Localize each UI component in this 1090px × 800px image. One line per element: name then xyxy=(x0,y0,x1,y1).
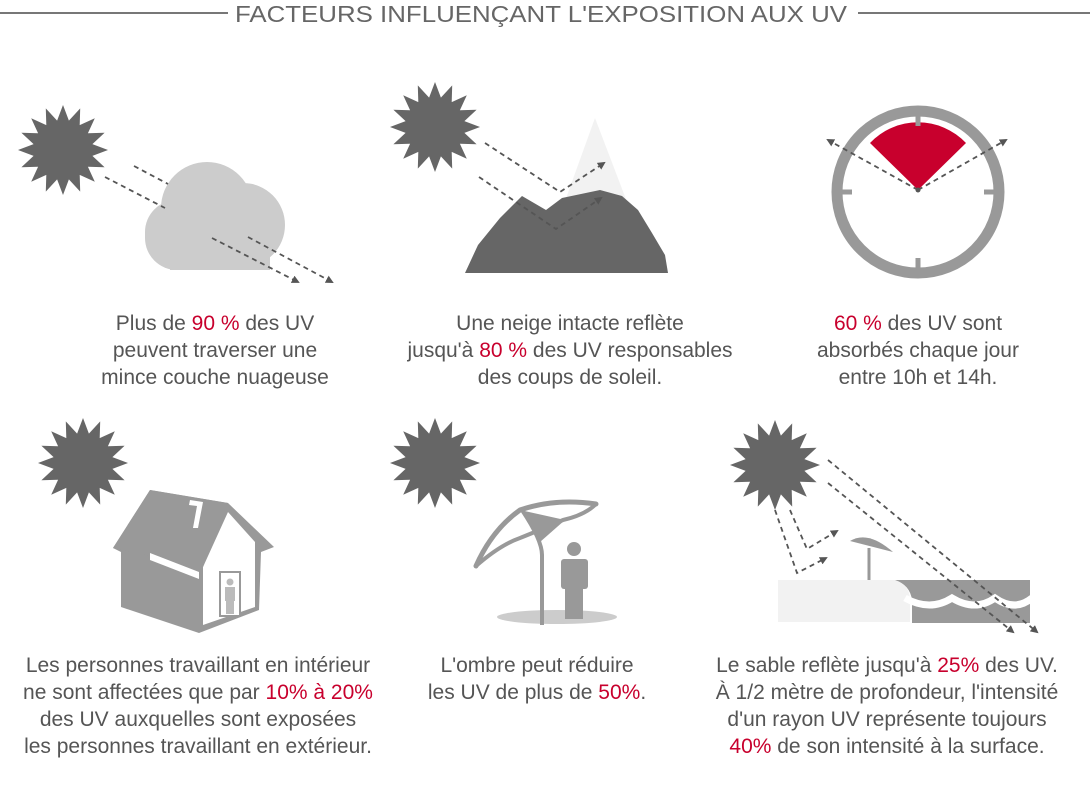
icon: sun xyxy=(730,420,820,510)
text: 40% xyxy=(729,735,771,758)
panel: indoor xyxy=(23,418,373,758)
arrows: reflection xyxy=(479,143,604,229)
icon: cloud xyxy=(145,162,285,270)
arrows: UV through cloud xyxy=(105,166,332,282)
text: d'un rayon UV représente toujours xyxy=(727,708,1047,731)
title: FACTEURS INFLUENÇANT L'EXPOSITION AUX UV xyxy=(235,1,848,27)
icon: sun xyxy=(390,82,480,172)
text: les personnes travaillant en extérieur. xyxy=(24,735,372,758)
text: 60 % des UV sont xyxy=(834,312,1002,335)
panel: snow xyxy=(390,82,733,389)
text: absorbés chaque jour xyxy=(817,339,1019,362)
icon: beach and water xyxy=(778,537,1032,623)
text: entre 10h et 14h. xyxy=(839,366,997,389)
icon: sun xyxy=(390,418,480,508)
icon: sun xyxy=(38,418,128,508)
text: Plus de 90 % des UV xyxy=(116,312,314,335)
text: jusqu'à xyxy=(406,339,479,362)
text: 80 % des UV responsables xyxy=(479,339,733,362)
text: peuvent traverser une xyxy=(113,339,317,362)
icon: sun xyxy=(18,105,108,195)
panel: sand and water xyxy=(716,420,1058,758)
arrows: UV reflection and penetration xyxy=(775,460,1037,632)
panel: clock xyxy=(817,111,1019,389)
text: L'ombre peut réduire xyxy=(440,654,634,677)
text: ne sont affectées que par xyxy=(23,681,266,704)
text: 50%. xyxy=(598,681,646,704)
text: À 1/2 mètre de profondeur, l'intensité xyxy=(716,681,1058,704)
text: des coups de soleil. xyxy=(478,366,662,389)
panel: shade xyxy=(390,418,646,704)
icon: clock xyxy=(828,111,1006,273)
icon: house xyxy=(113,490,274,633)
panel: clouds xyxy=(18,105,332,389)
text: Une neige intacte reflète xyxy=(456,312,684,335)
icon: mountain xyxy=(465,118,668,273)
text: 10% à 20% xyxy=(266,681,373,704)
icon: umbrella and person xyxy=(476,502,617,625)
text: les UV de plus de xyxy=(428,681,598,704)
text: de son intensité à la surface. xyxy=(771,735,1045,758)
text: Les personnes travaillant en intérieur xyxy=(26,654,370,677)
text: mince couche nuageuse xyxy=(101,366,329,389)
text: Le sable reflète jusqu'à 25% des UV. xyxy=(716,654,1058,677)
text: des UV auxquelles sont exposées xyxy=(40,708,356,731)
